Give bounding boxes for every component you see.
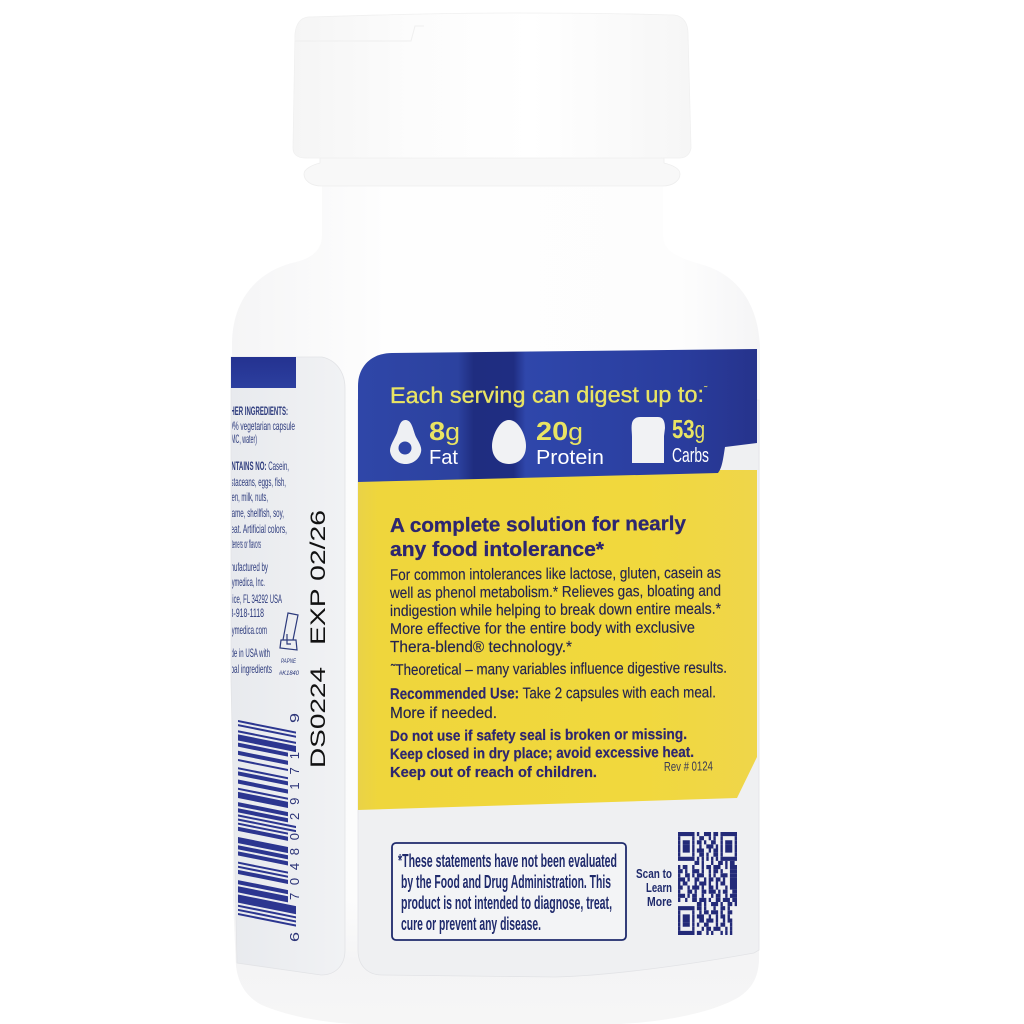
recommended use: More if needed. — [390, 705, 497, 722]
body copy: For common intolerances like lactose, gluten, casein as — [390, 565, 721, 584]
recommended use: Recommended Use: Take 2 capsules with each meal. — [390, 684, 716, 703]
expiry lot code: DS0224 — [307, 667, 330, 768]
PAPNE code — [279, 658, 299, 677]
barcode digits: 6 — [287, 932, 302, 942]
heading: complete solution: A complete solution for nearly — [390, 513, 687, 537]
icon: recycling symbol — [280, 613, 298, 650]
PAPNE code: #K1840 — [279, 670, 299, 677]
side label ingredient text: enzymedica.com — [222, 623, 267, 637]
side label ingredient text: (HPMC, water) — [222, 432, 257, 446]
warnings: Do not use if safety seal is broken or missing. — [390, 726, 687, 745]
bottle cap — [293, 13, 691, 158]
barcode digits — [287, 713, 302, 942]
stat: protein: 20g — [536, 416, 583, 446]
body copy: Thera-blend® technology.* — [390, 639, 572, 656]
body copy: well as phenol metabolism.* Relieves gas, bloating and — [389, 583, 721, 602]
scan to learn more: Scan to — [636, 866, 672, 881]
stat: carbs: 53g — [672, 414, 705, 444]
heading: each serving: ˜ — [703, 385, 708, 396]
side label ingredient text: gluten, milk, nuts, — [222, 490, 268, 504]
barcode digits: 70480 — [287, 833, 302, 900]
side label panel — [231, 357, 345, 975]
stat: carbs — [672, 414, 709, 467]
yellow panel — [358, 470, 757, 810]
side label ingredient text: crustaceans, eggs, fish, — [222, 475, 286, 489]
bottle base shading — [233, 900, 760, 1024]
warnings: Keep closed in dry place; avoid excessive heat. — [390, 744, 694, 763]
side label ingredient text: 888-918-1118 — [222, 606, 264, 620]
body copy: indigestion while helping to break down entire meals.* — [390, 601, 721, 620]
icon: egg — [492, 420, 526, 464]
FDA disclaimer box: product is not intended to diagnose, treat, — [401, 893, 612, 913]
warnings — [390, 726, 694, 781]
side label ingredient text: global ingredients — [222, 662, 272, 676]
side label blue bar — [231, 357, 296, 388]
scan to learn more — [636, 866, 672, 909]
FDA disclaimer box: by the Food and Drug Administration. This — [401, 872, 611, 892]
icon: avocado — [390, 420, 421, 464]
barcode digits: 29171 — [287, 752, 302, 820]
warnings: Keep out of reach of children. — [390, 764, 597, 781]
stat: fat: Fat — [429, 446, 458, 469]
body copy — [389, 565, 721, 656]
side label ingredient text: sesame, shellfish, soy, — [222, 506, 284, 520]
heading: each serving: Each serving can digest up to: — [390, 382, 704, 408]
side label ingredient text: Manufactured by — [222, 560, 268, 574]
side label ingredient text: Made in USA with — [222, 646, 270, 660]
theoretical note: ˜Theoretical – many variables influence digestive results. — [390, 660, 727, 679]
stat: protein — [536, 416, 604, 469]
side label ingredient text: Enzymedica, Inc. — [222, 575, 265, 589]
barcode digits: 9 — [287, 713, 302, 723]
stat: fat: 8g — [429, 416, 460, 446]
side label ingredient text: wheat. Artificial colors, — [221, 522, 287, 536]
blue header band — [358, 349, 757, 482]
FDA disclaimer box: *These statements have not been evaluated — [398, 851, 617, 871]
barcode — [263, 725, 292, 926]
expiry lot code: EXP 02/26 — [307, 510, 330, 645]
stat: carbs: Carbs — [672, 445, 709, 467]
scan to learn more: Learn — [646, 880, 672, 895]
heading: complete solution — [390, 513, 687, 561]
stat: fat — [429, 416, 460, 469]
side label ingredient text: 100% vegetarian capsule — [222, 419, 295, 433]
recommended use — [390, 684, 716, 722]
bottle neck ring — [304, 158, 680, 186]
side label ingredient text: OTHER INGREDIENTS: — [222, 404, 288, 418]
bottle back label infographic — [230, 12, 760, 1024]
heading: complete solution: any food intolerance* — [390, 539, 604, 561]
revision number: Rev # 0124 — [664, 758, 713, 774]
bottle body — [232, 186, 760, 1024]
body copy: More effective for the entire body with exclusive — [390, 619, 695, 638]
FDA disclaimer box — [392, 843, 626, 940]
QR code — [678, 834, 737, 933]
main label lower panel — [358, 400, 759, 977]
icon: bread — [632, 417, 665, 463]
expiry lot code — [307, 510, 330, 768]
cap tab notch — [295, 26, 424, 41]
side label ingredient text — [232, 406, 295, 676]
scan to learn more: More — [647, 894, 672, 909]
stat: protein: Protein — [536, 446, 604, 469]
side label ingredient text: sweeteners or flavors — [222, 537, 261, 551]
side label ingredient text: Venice, FL 34292 USA — [222, 592, 282, 606]
PAPNE code: PAPNE — [281, 658, 296, 665]
FDA disclaimer box: cure or prevent any disease. — [401, 914, 541, 934]
side label ingredient text: CONTAINS NO: Casein, — [222, 459, 289, 473]
